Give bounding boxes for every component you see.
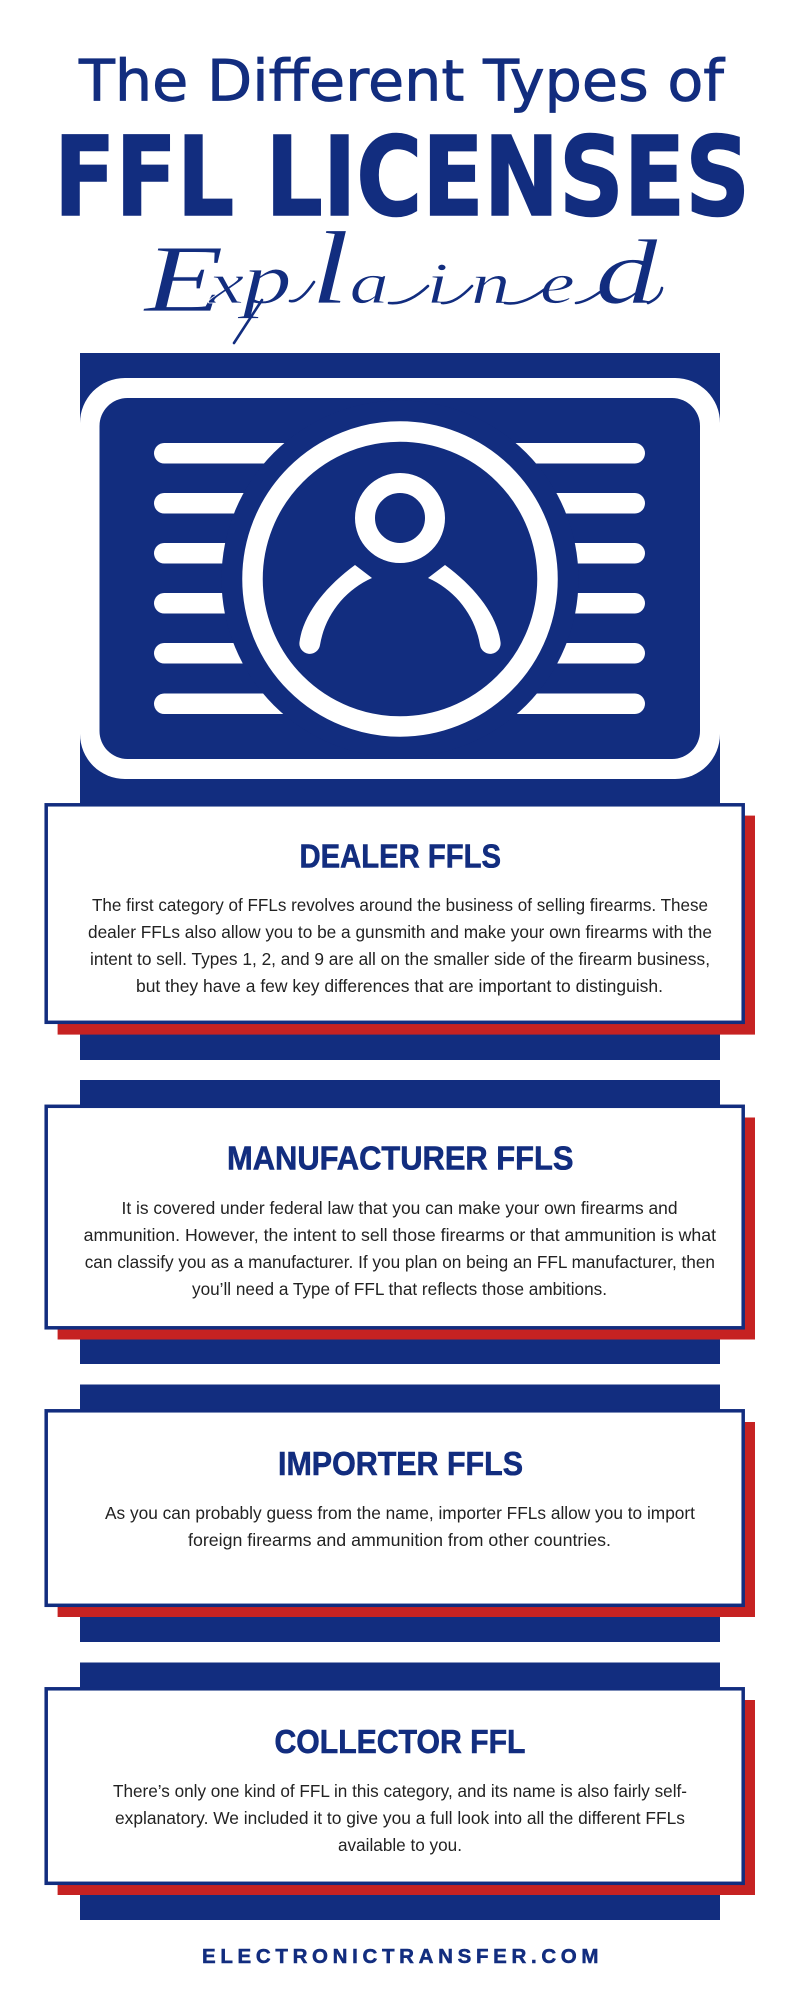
title line 3: script: d	[595, 221, 658, 323]
text block: manufacturer	[84, 1198, 716, 1299]
text block: dealer: but they have a few key differences that are important to distinguish.	[136, 976, 663, 996]
title line 3: script: a	[350, 252, 389, 316]
title line 3: script: l	[311, 210, 350, 326]
heading: importer: IMPORTER FFLS	[278, 1445, 523, 1482]
text block: dealer: The first category of FFLs revolves around the business of selling firearms. These	[92, 895, 708, 915]
icon: license card	[80, 378, 720, 779]
heading: manufacturer: MANUFACTURER FFLS	[227, 1140, 574, 1176]
title line 3: script: E	[142, 225, 224, 332]
heading: dealer: DEALER FFLS	[300, 838, 501, 874]
title line 3: script	[142, 210, 662, 343]
text block: importer	[105, 1503, 695, 1550]
title line 3: script: i	[427, 252, 448, 316]
text block: importer: As you can probably guess from the name, importer FFLs allow you to import	[105, 1503, 695, 1523]
text block: dealer: dealer FFLs also allow you to be a gunsmith and make your own firearms with the	[88, 922, 712, 942]
text block: collector: available to you.	[338, 1835, 462, 1855]
icon: person shoulders	[299, 565, 501, 654]
panel: dealer FFLs	[46, 805, 755, 1035]
icon: portrait circle	[252, 432, 548, 726]
panel: importer background	[80, 1384, 720, 1642]
text block: dealer: intent to sell. Types 1, 2, and 9 are all on the smaller side of the firearm business,	[90, 949, 710, 969]
text block: collector: explanatory. We included it to give you a full look into all the different FFLs	[115, 1808, 685, 1828]
text block: manufacturer: you’ll need a Type of FFL that reflects those ambitions.	[192, 1279, 607, 1299]
text block: collector	[113, 1781, 687, 1855]
icon: text lines	[154, 443, 645, 714]
title line 1: The Different Types of	[78, 49, 726, 115]
text block: manufacturer: It is covered under federal law that you can make your own firearms and	[122, 1198, 678, 1218]
text block: manufacturer: can classify you as a manufacturer. If you plan on being an FFL manufacturer, then	[85, 1252, 715, 1272]
icon: person head	[365, 483, 435, 553]
footer: website: ELECTRONICTRANSFER.COM	[202, 1945, 598, 1968]
text block: collector: There’s only one kind of FFL in this category, and its name is also fairly self-	[113, 1781, 687, 1801]
panel: importer FFLs	[46, 1411, 755, 1617]
panel: collector FFL	[46, 1689, 755, 1895]
panel: collector background	[80, 1662, 720, 1920]
panel: license hero background	[80, 353, 720, 1060]
text block: importer: foreign firearms and ammunition from other countries.	[188, 1530, 611, 1550]
heading: collector: COLLECTOR FFL	[274, 1723, 526, 1760]
panel: manufacturer background	[80, 1080, 720, 1364]
panel: manufacturer FFLs	[46, 1106, 755, 1340]
title line 3: script: e	[540, 252, 575, 316]
title line 3: script: n	[471, 252, 510, 316]
text block: manufacturer: ammunition. However, the intent to sell those firearms or that ammunition is what	[84, 1225, 716, 1245]
title line 3: script: x	[208, 252, 244, 316]
title line 3: script: p	[236, 239, 292, 319]
title	[54, 49, 750, 343]
text block: dealer	[88, 895, 712, 996]
